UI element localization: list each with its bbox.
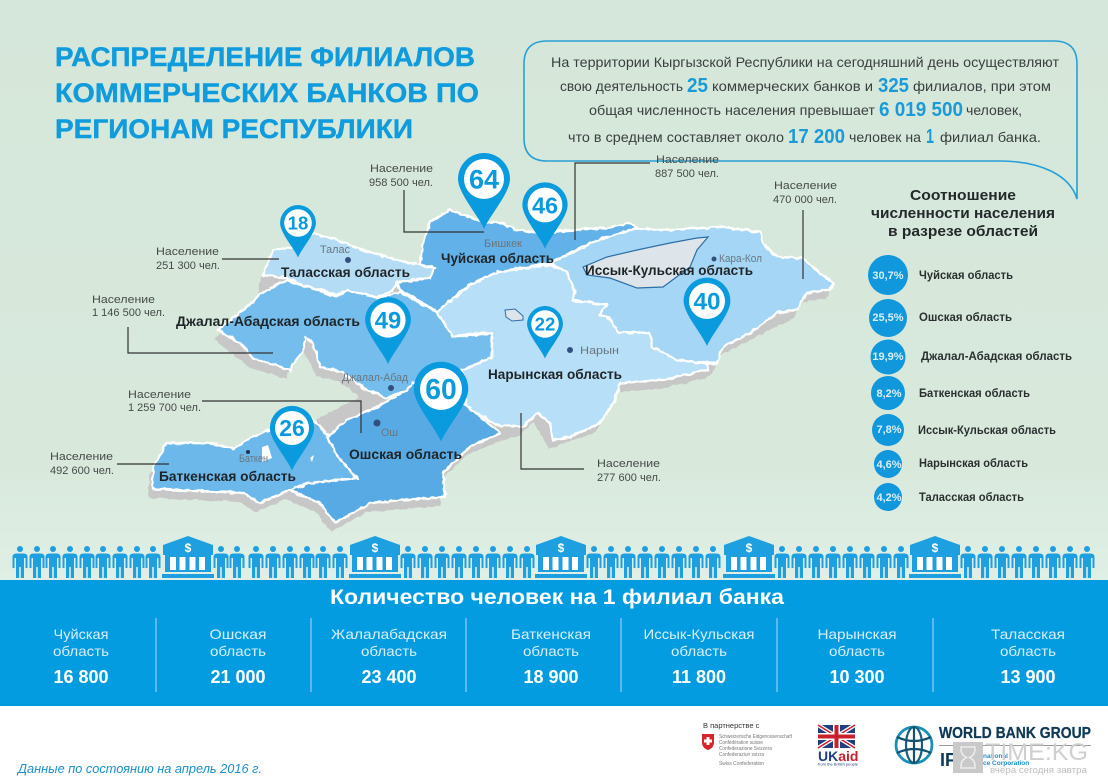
row of people and bank icons: $ — [558, 541, 565, 555]
logo: World Bank Group: WORLD BANK GROUP — [939, 725, 1091, 742]
population share heading: численности населения — [871, 205, 1055, 222]
pin: Issyk-Kul west 46: 46 — [532, 192, 558, 218]
share: Jalal-Abad — [870, 340, 1072, 374]
row of people and bank icons: $ — [932, 541, 939, 555]
population share heading: в разрезе областей — [888, 223, 1038, 240]
population callout: Chui — [369, 163, 484, 232]
share: Chui: 30,7% — [872, 270, 904, 282]
logo: Swiss partner: Confederaziun svizra — [719, 752, 764, 758]
stat: Jalal-Abad: Жалалабадская — [331, 626, 447, 642]
stat: Naryn: 10 300 — [829, 667, 885, 687]
region: Jalal-Abad — [218, 280, 492, 398]
city markers: Нарын — [580, 345, 619, 357]
stat: Naryn: Нарынская — [818, 626, 896, 642]
map of Kyrgyzstan — [149, 210, 833, 532]
share: Osh — [869, 299, 1012, 337]
city markers: Ош — [381, 427, 398, 439]
stat: Chui: Чуйская — [54, 626, 108, 642]
stat: Osh: 21 000 — [210, 667, 266, 687]
population callout: Issyk-Kul — [773, 180, 837, 279]
stat: Chui: 16 800 — [53, 667, 109, 687]
map shadow — [149, 219, 829, 532]
region: Osh — [290, 382, 500, 523]
region names: Нарынская область — [488, 367, 622, 382]
pin: Batken 26 — [270, 406, 314, 470]
population callout: Batken: 492 600 чел. — [50, 465, 114, 477]
share: Talas — [874, 483, 1024, 511]
stat: Chui: область — [53, 643, 109, 659]
share: Issyk-Kul: Иссык-Кульская область — [918, 425, 1056, 437]
watermark: TIME:KG: TIME:KG — [985, 739, 1088, 766]
share: Chui: Чуйская область — [919, 270, 1013, 282]
data date note: Данные по состоянию на апрель 2016 г. — [16, 762, 262, 776]
pin: Batken 26: 26 — [279, 415, 305, 441]
population callout: Issyk-Kul west: Население — [656, 154, 719, 166]
logo: World Bank Group: ce Corporation — [983, 760, 1029, 767]
pin: Naryn 22: 22 — [535, 314, 555, 335]
title: РЕГИОНАМ РЕСПУБЛИКИ — [55, 114, 413, 144]
population share heading — [871, 187, 1055, 240]
population callout: Osh — [128, 389, 361, 433]
population callout: Naryn: Население — [597, 458, 660, 470]
stat: Batken — [511, 626, 591, 687]
share: Talas: 4,2% — [876, 492, 902, 504]
share: Naryn: 4,6% — [876, 459, 902, 471]
blue band: people per branch — [0, 580, 1108, 706]
city markers: Кара-Кол — [719, 253, 762, 265]
share: Osh: Ошская область — [919, 312, 1012, 324]
city markers — [239, 238, 762, 465]
stat: Osh — [210, 626, 266, 687]
stat: Jalal-Abad — [331, 626, 447, 687]
share: Naryn — [874, 450, 1028, 478]
intro speech bubble: коммерческих банков и — [712, 78, 873, 94]
intro speech bubble: филиал банка. — [940, 129, 1041, 145]
share: Talas: Таласская область — [919, 492, 1024, 504]
logo: Swiss partner: В партнерстве с — [703, 721, 760, 730]
intro speech bubble: человек, — [966, 102, 1022, 118]
intro speech bubble: человек на — [849, 129, 921, 145]
logo: Swiss partner — [702, 721, 793, 767]
title — [55, 42, 479, 144]
page background — [0, 0, 1108, 580]
pin: Naryn 22 — [527, 306, 563, 358]
region names: Иссык-Кульская область — [585, 263, 753, 278]
intro speech bubble — [524, 41, 1077, 199]
stat: Jalal-Abad: область — [361, 643, 417, 659]
intro speech bubble: 17 200 — [788, 126, 845, 148]
stat: Issyk-Kul: область — [671, 643, 727, 659]
population callout: Jalal-Abad: 1 146 500 чел. — [92, 307, 165, 319]
intro speech bubble: 25 — [687, 75, 708, 97]
stat: Osh: область — [210, 643, 266, 659]
logo: World Bank Group — [896, 725, 1091, 770]
intro speech bubble: что в среднем составляет около — [568, 129, 784, 145]
pin: Osh 60: 60 — [425, 374, 457, 406]
regions — [153, 210, 833, 523]
share: Naryn: Нарынская область — [919, 458, 1028, 470]
stat: Talas: область — [1000, 643, 1056, 659]
city markers: Баткен — [239, 453, 268, 465]
stat: Naryn: область — [829, 643, 885, 659]
logo: World Bank Group: IF — [940, 750, 956, 770]
city markers: Талас — [320, 244, 350, 256]
region: Batken — [153, 417, 357, 503]
pin: Issyk-Kul 40: 40 — [693, 289, 721, 316]
share: Issyk-Kul — [872, 414, 1056, 446]
lake Son-Kul — [505, 309, 523, 321]
pin: Chui 64: 64 — [469, 164, 499, 194]
share: Jalal-Abad: 19,9% — [872, 351, 904, 363]
logo: Swiss partner: Confederazione Svizzera — [719, 746, 772, 752]
band heading: Количество человек на 1 филиал банка — [330, 586, 784, 609]
intro speech bubble: На территории Кыргызской Республики на сегодняшний день осуществляют — [551, 54, 1060, 70]
row of people and bank icons — [12, 536, 1094, 578]
intro speech bubble: свою деятельность — [560, 78, 683, 94]
population callout: Osh: 1 259 700 чел. — [128, 402, 201, 414]
stat: Jalal-Abad: 23 400 — [361, 667, 417, 687]
population callout: Issyk-Kul: 470 000 чел. — [773, 194, 837, 206]
region names: Ошская область — [349, 447, 462, 462]
logo: World Bank Group: national — [983, 753, 1008, 760]
share: Chui — [868, 255, 1013, 295]
pin: Issyk-Kul 40 — [684, 278, 730, 346]
logo: UK aid: from the British people — [818, 762, 859, 766]
population callout: Chui: 958 500 чел. — [369, 177, 433, 189]
pin: Jalal-Abad 49: 49 — [375, 307, 401, 334]
share: Batken: Баткенская область — [919, 388, 1030, 400]
population callout: Talas — [156, 246, 279, 272]
population callout: Issyk-Kul west — [575, 154, 719, 240]
share: Batken: 8,2% — [876, 388, 902, 400]
logo: Swiss partner: Schweizerische Eidgenossenschaft — [719, 734, 793, 740]
stat: Naryn — [818, 626, 896, 687]
city markers: Бишкек — [484, 238, 522, 250]
population callout: Osh: Население — [128, 389, 191, 401]
population callout: Batken: Население — [50, 451, 113, 463]
share: Osh: 25,5% — [872, 312, 904, 324]
pin: Talas 18 — [280, 205, 316, 258]
region: Issyk-Kul — [550, 227, 833, 363]
stat: Osh: Ошская — [210, 626, 266, 642]
population callout: Jalal-Abad — [92, 294, 273, 353]
title: РАСПРЕДЕЛЕНИЕ ФИЛИАЛОВ — [55, 42, 475, 72]
population callout: Issyk-Kul: Население — [774, 180, 837, 192]
share: Issyk-Kul: 7,8% — [876, 424, 902, 436]
population share list — [868, 255, 1072, 511]
population callout: Naryn — [521, 413, 661, 484]
intro speech bubble: общая численность населения превышает — [589, 102, 876, 118]
population callout: Issyk-Kul west: 887 500 чел. — [655, 168, 719, 180]
watermark: TIME:KG — [953, 739, 1088, 776]
stat: Batken: область — [523, 643, 579, 659]
logo: UK aid — [818, 725, 859, 766]
stat: Talas: Таласская — [991, 626, 1065, 642]
region names: Чуйская область — [441, 251, 554, 266]
logo: Swiss partner: Confédération suisse — [719, 740, 763, 746]
pin: Talas 18: 18 — [288, 213, 308, 234]
region names: Джалал-Абадская область — [176, 314, 360, 329]
row of people and bank icons: $ — [185, 541, 192, 555]
Batken enclave marks — [262, 445, 314, 462]
population callout: Talas: Население — [156, 246, 219, 258]
region: Talas — [263, 233, 435, 297]
stat: Issyk-Kul — [644, 626, 754, 687]
stat: Batken: Баткенская — [511, 626, 591, 642]
row of people and bank icons: $ — [372, 541, 379, 555]
population callout: Batken — [50, 451, 169, 477]
share: Jalal-Abad: Джалал-Абадская область — [921, 351, 1072, 363]
region names — [159, 251, 753, 484]
intro speech bubble: 325 — [878, 75, 909, 97]
row of people and bank icons: $ — [746, 541, 753, 555]
pin: Chui 64 — [458, 153, 510, 229]
intro speech bubble: 1 — [926, 126, 934, 148]
region names: Баткенская область — [159, 469, 296, 484]
pin: Jalal-Abad 49 — [365, 297, 411, 364]
population callout: Jalal-Abad: Население — [92, 294, 155, 306]
pin: Osh 60 — [414, 362, 468, 442]
stat: Issyk-Kul: 11 800 — [672, 667, 726, 687]
title: КОММЕРЧЕСКИХ БАНКОВ ПО — [55, 78, 479, 108]
watermark: TIME:KG: вчера сегодня завтра — [990, 765, 1088, 776]
stat: Talas: 13 900 — [1000, 667, 1056, 687]
stat: Talas — [991, 626, 1065, 687]
stat: Issyk-Kul: Иссык-Кульская — [644, 626, 754, 642]
population callout: Chui: Население — [370, 163, 433, 175]
intro speech bubble: 6 019 500 — [879, 99, 963, 121]
population callout: Naryn: 277 600 чел. — [597, 472, 661, 484]
pin: Issyk-Kul west 46 — [522, 182, 568, 248]
logo: UK aid: UKaid — [818, 748, 858, 764]
region names: Таласская область — [281, 265, 410, 280]
stat: Chui — [53, 626, 109, 687]
city markers: Джалал-Абад — [342, 372, 409, 384]
stat: Batken: 18 900 — [523, 667, 579, 687]
region: Naryn — [437, 265, 708, 440]
region: Chui — [397, 210, 637, 312]
intro speech bubble: филиалов, при этом — [913, 78, 1051, 94]
population callout: Talas: 251 300 чел. — [156, 260, 220, 272]
population share heading: Соотношение — [910, 187, 1016, 204]
lake Issyk-Kul — [583, 237, 708, 288]
share: Batken — [871, 376, 1030, 410]
logo: Swiss partner: Swiss Confederation — [719, 761, 764, 767]
